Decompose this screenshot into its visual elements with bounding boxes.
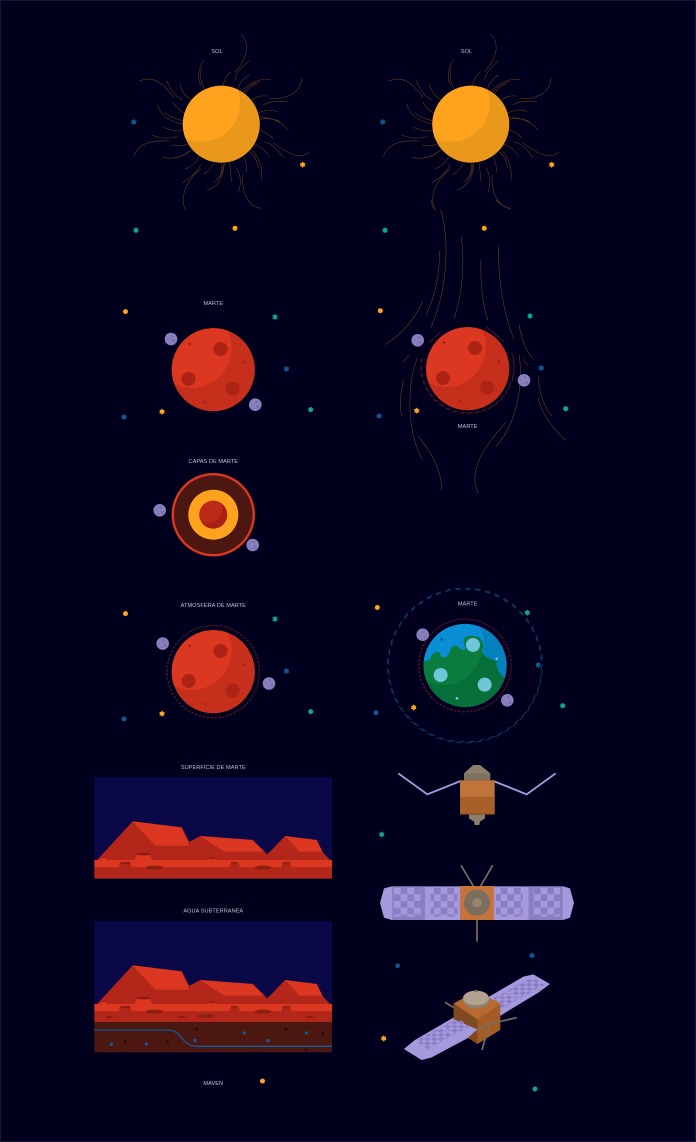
panel: atmosfera de marte [122,603,313,722]
icon: sun rays [383,34,559,210]
label: sol: SOL [211,49,223,55]
icon: sun rays [134,34,309,210]
panel: sol [131,34,309,233]
icon: satellite isometric view [404,974,550,1060]
icon: mars planet [152,308,255,411]
icon: outer atmosphere ring [388,588,542,743]
panel: marte con viento solar [376,200,568,493]
icon: atmosphere ring [167,625,260,718]
icon: inner atmosphere ring [418,619,512,712]
icon: orange dot [260,1078,265,1084]
icon: planet with water [424,624,507,708]
icon: stars [122,611,313,722]
icon: stars [131,119,306,233]
label: maven: MAVEN [203,1081,223,1087]
icon: teal dot [532,1086,538,1092]
icon: mars planet [152,610,255,713]
icon: stars [374,605,565,715]
icon: mars planet [406,307,509,410]
icon: teal star [379,831,384,838]
icon: stars [376,308,568,418]
landscape: mars surface [94,777,332,879]
chart: solar wind field lines [385,200,566,493]
icon: satellite top view [380,865,574,942]
label: marte: MARTE [458,424,478,430]
icon: orange star [381,1035,386,1042]
label: marte: MARTE [203,301,223,307]
label: sol: SOL [461,49,472,55]
icon: moons [156,637,275,690]
icon: satellite front view [398,765,556,825]
label: superficie de marte: SUPERFICIE DE MARTE [181,765,246,771]
label: marte: MARTE [458,602,478,608]
icon: moons [165,333,262,411]
icon: moons [153,504,259,551]
icon: sun [413,65,509,163]
panel: marte antiguo [374,588,565,743]
icon: stars [380,119,554,233]
panel: capas de marte [153,459,259,555]
panel: agua subterranea [94,908,332,1052]
landscape: mars subsurface water [94,921,332,1052]
label: capas de marte: CAPAS DE MARTE [188,459,238,465]
icon: moons [411,334,530,387]
icon: blue dots [395,952,535,968]
icon: mars layers [173,474,254,555]
icon: stars [122,309,313,420]
panel: marte [122,301,313,420]
label: agua subterranea: AGUA SUBTERRANEA [183,908,243,914]
icon: sun [163,65,260,163]
label: atmosfera de marte: ATMOSFERA DE MARTE [181,603,246,609]
panel: superficie de marte [94,765,332,879]
icon: moons [416,628,514,707]
panel: sol y viento solar [380,34,559,233]
